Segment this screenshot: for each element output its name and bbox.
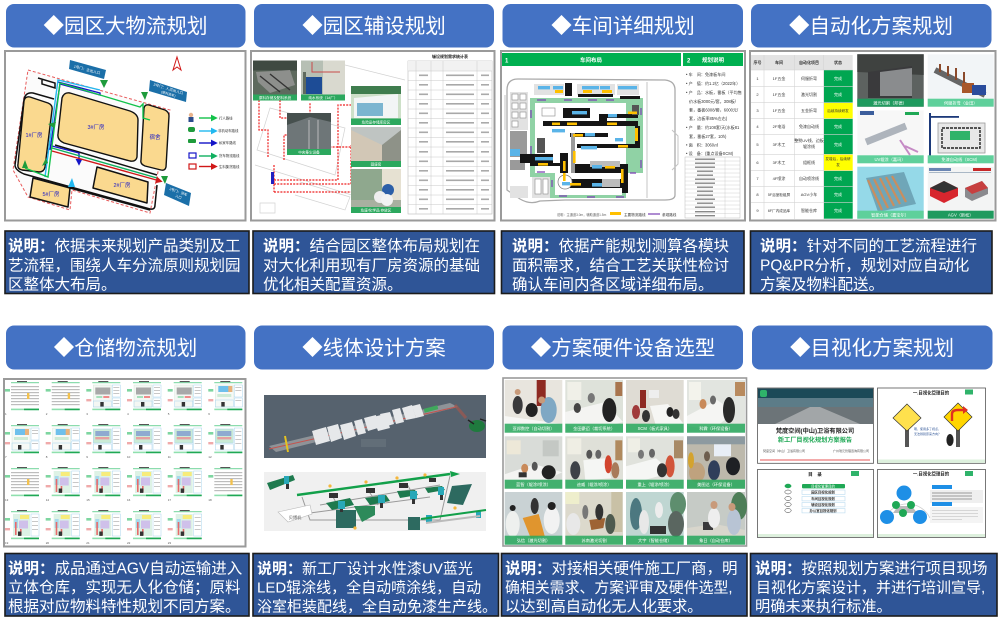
slide: contents: 园区目视化规划 — [811, 490, 835, 495]
photo 12: 象日（自动仓库） — [699, 537, 733, 544]
header: 园区辅设规划 — [254, 4, 494, 48]
gate label: 3号门 — [149, 80, 187, 102]
photo 9 — [505, 492, 562, 545]
status table: AGV小车 — [801, 191, 817, 197]
status table: 1F五金 — [773, 75, 785, 81]
building: 1#厂房 — [18, 97, 52, 172]
description: 自动化方案规划 — [750, 231, 992, 294]
status table: 自动化项目 — [799, 59, 819, 65]
header: 仓储物流规划: ◆仓储物流规划 — [54, 337, 197, 360]
photo: AGV: AGV（新松） — [948, 212, 973, 218]
photo 12 — [687, 492, 747, 545]
plan notes text: 套，番板6008/套，6000元/ — [689, 106, 739, 112]
slide: purpose diagram — [878, 470, 986, 538]
building: 3#厂房 — [58, 93, 138, 161]
description: 园区大物流规划: 艺流程，围绕人车分流原则规划园 — [8, 256, 241, 274]
slide: contents — [758, 470, 874, 538]
workshop floor plan: 参观路线 — [662, 212, 677, 217]
photo 1: 亚邦数控（自动切割） — [513, 425, 554, 432]
status table: 2F电浴 — [773, 123, 785, 129]
thumbnail numbers: 2 — [46, 412, 48, 416]
photo: 激光切割 — [857, 54, 924, 107]
photo: 原料存储系统 — [253, 60, 297, 100]
photo: AGV — [928, 167, 994, 219]
photo 2: 金田豪迈（裁切系统） — [573, 425, 615, 432]
thumbnail numbers: 13 — [5, 498, 9, 502]
status table: 5F浴室柜组屏 — [768, 192, 790, 197]
photo: 危险品库房 — [351, 86, 401, 125]
panel: 仓储物流规划 slide thumbnails — [4, 379, 246, 546]
status table: 整熨UV线、边板 — [794, 137, 824, 143]
status table: 状态 — [834, 59, 842, 65]
status table: 3F木工 — [773, 159, 785, 165]
status table: 6 — [756, 160, 759, 165]
road outline — [15, 78, 157, 210]
table: 辅设规划需求统计表: 辅设规划需求统计表 — [432, 53, 468, 59]
photo: 纯水系统 — [301, 60, 345, 100]
description: 园区辅设规划: 优化相关配置资源。 — [263, 276, 403, 294]
plan notes text — [686, 71, 742, 156]
photo 6 — [565, 436, 623, 489]
gate label: 3号门: 3号门：人员出入口 — [153, 82, 184, 96]
thumbnail numbers: 20 — [46, 541, 49, 545]
purple arrows — [531, 100, 641, 197]
photo 7: 重上（辊涂/喷涂） — [637, 481, 672, 488]
photo 6: 迪威（辊涂/喷涂） — [577, 481, 611, 488]
photo: 中央集尘设备: 中央集尘设备 — [298, 150, 320, 154]
description: 园区辅设规划 — [253, 231, 494, 294]
plan notes text: • 车 间：免漆板车间 — [686, 71, 725, 77]
thumbnail numbers: 5 — [168, 412, 170, 416]
photo 11: 大宇（智能仓储） — [638, 537, 672, 544]
legend: routes: 生料集货路线 — [219, 164, 240, 169]
photo: 智能仓储: 智能仓储（嘉宝尔） — [871, 212, 909, 218]
photo 3: SCM（板式家具） — [638, 425, 672, 432]
photo 8 — [687, 436, 745, 489]
equipment clusters — [510, 84, 639, 198]
status table: 4F喷涂 — [773, 175, 785, 181]
header: 自动化方案规划 — [751, 4, 992, 48]
green logistics ring — [530, 98, 643, 198]
building: 宿舍: 宿舍 — [149, 133, 161, 141]
plan notes text: • 产 品：水板，番板（平均售 — [686, 89, 742, 95]
panel: 园区大物流规划 site map — [5, 51, 246, 220]
photo: 免漆自动线: 免漆自动线（SCM） — [941, 156, 980, 163]
gate label: 2号门 — [164, 183, 191, 206]
description: 线体设计方案: 浴室柜装配线，全自动免漆生产线。 — [257, 598, 497, 616]
header: 仓储物流规划 — [6, 326, 246, 370]
description: 仓储物流规划: 说明：成品通过AGV自动运输进入 — [8, 560, 242, 578]
gate label: 2号门: 入口 — [174, 194, 182, 200]
description: 线体设计方案: LED辊涂线，全自动喷涂线，自动 — [257, 578, 481, 596]
header: 车间详细规划: ◆车间详细规划 — [551, 15, 695, 38]
status table: 完成 — [834, 91, 842, 97]
description: 车间详细规划: 确认车间内各区域详细布局。 — [512, 276, 714, 294]
slide: purpose diagram: 一.目视化管理目的 — [913, 470, 950, 478]
slide: contents: 办公室目视化规划 — [809, 508, 837, 513]
status table: 7 — [756, 176, 759, 181]
photo 10 — [565, 492, 623, 545]
status table: 五金折弯 — [801, 107, 817, 113]
thumbnail numbers: 9 — [86, 455, 88, 459]
panel: 园区辅设规划 — [251, 51, 494, 220]
description: 园区大物流规划: 区整体大布局。 — [8, 276, 117, 294]
building: 5#厂房 — [30, 178, 70, 207]
yellow flow arrows — [538, 90, 638, 186]
background plan lines — [255, 65, 405, 213]
thumbnail numbers: 15 — [86, 498, 90, 502]
gate triangles — [22, 80, 168, 184]
slide: cover — [758, 388, 874, 463]
slide: cover: 广州瑞元管理咨询有限公司 — [833, 448, 869, 453]
panel: 车间详细规划 — [501, 51, 745, 220]
status table: 2 — [756, 92, 759, 97]
status table: 组框线 — [803, 159, 815, 165]
photo 2 — [565, 380, 623, 433]
gate label: 1号门 — [69, 60, 106, 79]
description: 仓储物流规划: 立体仓库，实现无人化仓储；原料 — [8, 578, 241, 596]
slide: signs: 无法辨别原来方向？ — [914, 431, 941, 436]
photo: UV辊涂: UV辊涂（嘉玛） — [875, 156, 905, 163]
photo 11 — [626, 492, 686, 545]
photo 3 — [626, 380, 684, 433]
thumbnail numbers: 21 — [86, 541, 90, 545]
slide: signs: 嗯，使用多了视点， — [914, 426, 941, 431]
photo 5: 蓝智（辊涂/喷涂） — [516, 481, 551, 488]
status table: 智能仓库 — [801, 207, 817, 213]
bar: 规划说明 — [683, 53, 743, 66]
legend: routes: 非机动车路线 — [218, 128, 239, 133]
status table: 6F厂内成品库 — [768, 208, 790, 213]
header: 线体设计方案 — [254, 326, 494, 370]
status table: 3 — [756, 108, 759, 113]
description: 车间详细规划 — [502, 231, 744, 294]
status table: 完成 — [834, 141, 842, 147]
status table: 完成 — [834, 123, 842, 129]
routes — [25, 80, 160, 181]
legend: routes — [188, 113, 240, 169]
building: 宿舍 — [141, 105, 169, 170]
status table: 1F五金 — [773, 107, 785, 113]
thumbnail numbers: 14 — [46, 498, 49, 502]
thumbnail numbers: 3 — [86, 412, 88, 416]
header: 目视化方案规划 — [752, 326, 992, 370]
building: 2#厂房 — [93, 167, 148, 203]
workshop floor plan: 说明：主通道3.0m，辅助通道1.5m — [557, 212, 607, 217]
description: 园区辅设规划: 说明：结合园区整体布局规划在 — [263, 237, 480, 255]
thumbnail numbers: 17 — [168, 498, 171, 502]
site boundary — [13, 70, 170, 213]
description: 目视化方案规划: 明确未来执行标准。 — [755, 598, 892, 616]
slide: contents: 目视化管理目的 — [811, 484, 835, 489]
description: 仓储物流规划 — [5, 554, 249, 616]
photo 9: 弘信（激光切割） — [517, 537, 550, 544]
description: 方案硬件设备选型: 说明：对接相关硬件施工厂商，明 — [505, 560, 738, 578]
photo: 智能仓储 — [857, 167, 924, 219]
red dashed routes — [259, 100, 351, 192]
render: assembly line view: 贝博机 — [289, 514, 302, 521]
status table: 车间 — [775, 59, 783, 65]
slide: contents: 车间目视化规划 — [811, 496, 835, 501]
status table: 5 — [756, 142, 759, 147]
status table: 辊涂线 — [803, 143, 815, 149]
north arrow — [173, 57, 181, 70]
building: 2#厂房: 2#厂房 — [113, 181, 131, 189]
photo: 危废化学品存放区 — [351, 169, 401, 213]
description: 园区大物流规划 — [5, 231, 249, 294]
black process lines — [520, 83, 640, 193]
description: 车间详细规划: 说明：依据产能规划测算各模块 — [512, 236, 729, 255]
slide: cover: 梵度空间(中山)卫浴有限公司 — [776, 427, 854, 435]
gate label: 3号门: (原料货车) — [161, 89, 176, 98]
header: 方案硬件设备选型 — [502, 326, 743, 370]
status table: 发增后，后续研 — [825, 156, 851, 161]
status table: 激光切割 — [801, 91, 817, 97]
table: 辅设规划需求统计表 — [408, 53, 492, 214]
description: 方案硬件设备选型 — [502, 554, 747, 616]
status table: 完成 — [834, 75, 842, 81]
status table: 1 — [756, 76, 759, 81]
slide: cover: 梵度空间（中山）卫浴有限公司 — [763, 448, 805, 453]
legend: routes: 私家车路线 — [219, 140, 237, 145]
workshop floor plan: 主要物流路线 — [624, 212, 646, 217]
photo: 原料存储系统: 原料存储及配料系统 — [259, 95, 292, 100]
bar: 规划说明: 2 — [687, 58, 691, 64]
thumbnail numbers: 23 — [168, 541, 171, 545]
photo: 免漆自动线 — [928, 110, 994, 163]
photo 5 — [505, 436, 562, 489]
thumbnail numbers: 18 — [208, 498, 212, 502]
status table: 3F木工 — [773, 141, 785, 147]
equipment table — [685, 157, 740, 218]
slide: signs — [878, 388, 986, 463]
bar: 车间布局 — [502, 53, 681, 66]
description: 车间详细规划: 面积需求，结合工艺关联性检讨 — [512, 256, 729, 274]
bar: 规划说明: 规划说明 — [702, 56, 724, 64]
thumbnail numbers: 16 — [127, 498, 131, 502]
status table: 免漆自动线 — [799, 123, 819, 129]
photo 7 — [626, 436, 684, 489]
description: 目视化方案规划: 目视化方案设计，并进行培训宣导, — [756, 578, 985, 596]
description: 方案硬件设备选型: 确相关需求、方案评审及硬件选型, — [505, 578, 732, 596]
photo: 固废房 — [351, 127, 401, 167]
plan notes text: • 产 值：约1.2亿（2022年） — [686, 80, 740, 86]
description: 自动化方案规划: PQ&PR分析，规划对应自动化 — [760, 256, 969, 274]
description: 仓储物流规划: 根据对应物料特性规划不同方案。 — [8, 596, 241, 616]
photo: 中央集尘设备 — [287, 113, 331, 155]
plan notes text: • 产 量：约108套/天(水板81 — [686, 124, 740, 130]
header: 园区辅设规划: ◆园区辅设规划 — [302, 15, 446, 38]
header: 线体设计方案: ◆线体设计方案 — [302, 337, 446, 360]
description: 园区大物流规划: 说明：依据未来规划产品类别及工 — [8, 237, 241, 255]
slide: signs: 一.目视化管理目的 — [913, 390, 950, 396]
description: 自动化方案规划: 方案及物料配送。 — [760, 276, 884, 294]
status table: 1F五金 — [773, 91, 785, 97]
status table — [751, 55, 853, 219]
legend: routes: 货车物流路线 — [219, 153, 240, 158]
plan notes text: 套，边板率85%左右) — [689, 115, 728, 121]
plan notes text: 套，番板27套，10h) — [689, 133, 727, 139]
description: 自动化方案规划: 说明：针对不同的工艺流程进行 — [760, 237, 977, 255]
status table: 完成 — [834, 175, 842, 181]
photo 8: 美图达（环保设备） — [697, 481, 735, 488]
thumbnail numbers: 12 — [208, 455, 212, 459]
header: 目视化方案规划: ◆目视化方案规划 — [790, 337, 954, 360]
photo: 伺服折弯: 伺服折弯（金田） — [944, 100, 977, 106]
status table: 发 — [836, 162, 840, 167]
panel: 线体设计方案 — [264, 395, 486, 531]
photo 10: 苏南激光切割 — [582, 537, 607, 544]
gate label: 1号门: 1号门：主出入口 — [73, 64, 101, 76]
blue labels — [510, 86, 637, 187]
plan notes text: • 设 备：(重点设备SCM) — [686, 150, 734, 156]
thumbnail numbers: 11 — [168, 455, 171, 459]
building: 1#厂房: 1#厂房 — [25, 131, 43, 139]
header: 车间详细规划 — [502, 4, 743, 48]
panel: 目视化方案规划 slides — [758, 388, 986, 538]
thumbnail numbers — [5, 412, 212, 545]
thumbnail numbers: 19 — [5, 541, 9, 545]
header: 园区大物流规划: ◆园区大物流规划 — [44, 15, 208, 38]
thumbnail numbers: 7 — [5, 455, 7, 459]
photo 4: 科霖（环保设备） — [699, 425, 733, 432]
plan notes text: 价水板3000元/套，308板/ — [689, 98, 737, 104]
status table: 8 — [756, 192, 759, 197]
photo 1 — [505, 380, 562, 433]
description: 目视化方案规划 — [750, 554, 997, 616]
slide: cover: 新工厂目视化规划方案报告 — [778, 436, 852, 444]
bar: 车间布局: 车间布局 — [580, 56, 602, 64]
status table: 序号 — [754, 59, 762, 65]
thumbnail numbers: 4 — [127, 412, 129, 416]
description: 线体设计方案: 说明：新工厂设计水性漆UV蓝光 — [257, 560, 473, 578]
status table: 完成 — [834, 207, 842, 213]
photo: 危废化学品存放区: 危废/化学品 存放区 — [361, 208, 392, 212]
panel: 自动化方案规划 — [750, 51, 996, 220]
building: 5#厂房: 5#厂房 — [42, 190, 60, 198]
render: assembly line view — [264, 471, 486, 531]
status table: 4 — [756, 124, 759, 129]
thumbnail numbers: 8 — [46, 455, 48, 459]
description: 园区辅设规划: 对大化利用现有厂房资源的基础 — [263, 256, 480, 274]
thumbnail numbers: 6 — [208, 412, 210, 416]
slide: contents: 目 录 — [808, 471, 822, 478]
photo: 伺服折弯 — [928, 54, 994, 107]
status table: 后续持续研发 — [827, 108, 849, 113]
plan notes text: • 面 积：3060㎡ — [686, 142, 718, 148]
photo: 固废房: 固废房 — [371, 162, 382, 166]
description: 线体设计方案 — [253, 554, 498, 616]
status table: 9 — [756, 208, 759, 213]
thumbnail numbers: 1 — [5, 412, 7, 416]
photo: UV辊涂 — [857, 110, 924, 163]
description: 目视化方案规划: 说明：按照规划方案进行项目现场 — [755, 560, 988, 578]
status table: 伺服折弯 — [801, 75, 817, 81]
status table: 自动喷涂线 — [799, 175, 819, 181]
photo: 危险品库房: 危险品存储库房区 — [362, 120, 391, 124]
photo 4 — [687, 380, 745, 433]
header: 方案硬件设备选型: ◆方案硬件设备选型 — [531, 337, 715, 360]
photo: 激光切割: 激光切割（邦德） — [873, 100, 907, 106]
workshop floor plan — [505, 79, 678, 217]
render: production line top view — [264, 395, 486, 458]
thumbnail numbers: 10 — [127, 455, 131, 459]
panel: 方案硬件设备选型 photos — [503, 378, 747, 546]
description: 方案硬件设备选型: 以达到高自动化无人化要求。 — [505, 598, 702, 616]
thumbnail numbers: 22 — [127, 541, 131, 545]
bar: 车间布局: 1 — [505, 58, 509, 64]
legend: routes: 行人路线 — [219, 116, 233, 120]
status table: 完成 — [834, 191, 842, 197]
slide: contents: 辅设目视化规划 — [811, 502, 835, 507]
building: 3#厂房: 3#厂房 — [87, 123, 105, 131]
header: 自动化方案规划: ◆自动化方案规划 — [789, 15, 953, 38]
photo: 纯水系统: 纯水系统（1#厂） — [308, 95, 338, 100]
header: 园区大物流规划 — [6, 4, 246, 48]
legend — [610, 212, 621, 215]
gate label: 2号门: 2号门：货车 — [169, 186, 189, 197]
